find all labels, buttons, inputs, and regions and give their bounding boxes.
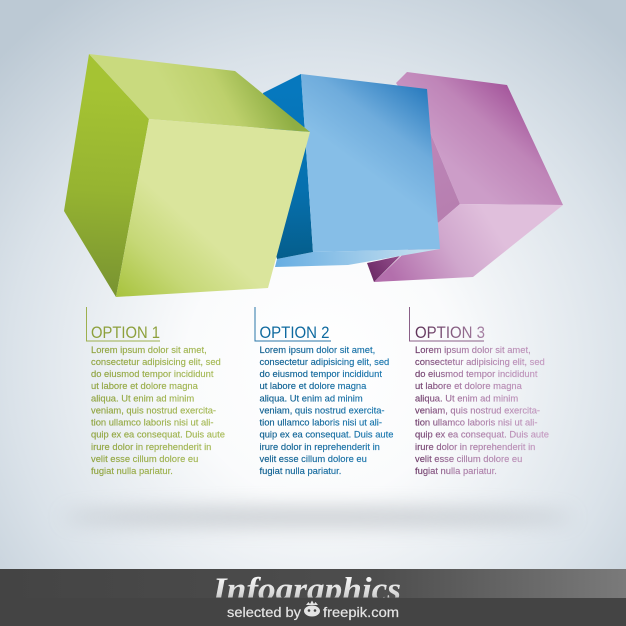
option 2 text: Lorem ipsum dolor sit amet, <box>260 344 375 355</box>
option 1 text <box>91 344 225 476</box>
icon: freepik logo <box>304 600 320 616</box>
option 2 text: veniam, quis nostrud exercita- <box>260 404 385 416</box>
infographics title: Infographics <box>212 572 401 608</box>
floor shadow <box>63 508 573 526</box>
option 1 heading: OPTION 1 <box>91 324 160 342</box>
green cube <box>64 54 310 297</box>
footer bar <box>0 569 626 626</box>
option 1 text: ut labore et dolore magna <box>91 380 199 391</box>
option 3 text: aliqua. Ut enim ad minim <box>415 392 518 404</box>
option 3 text: veniam, quis nostrud exercita- <box>415 404 540 416</box>
option 1 text: fugiat nulla pariatur. <box>91 465 173 476</box>
option 3 text: do eiusmod tempor incididunt <box>415 368 538 379</box>
freepik url: freepik.com <box>323 605 399 620</box>
option 1 column <box>86 307 225 476</box>
option 3 text: irure dolor in reprehenderit in <box>415 441 535 452</box>
option 1 text: veniam, quis nostrud exercita- <box>91 404 216 416</box>
option 3 text: quip ex ea consequat. Duis aute <box>415 428 549 440</box>
option 3 column <box>410 307 549 476</box>
option 2 heading: OPTION 2 <box>260 324 330 342</box>
option 2 text: fugiat nulla pariatur. <box>260 465 341 476</box>
option 1 text: tion ullamco laboris nisi ut ali- <box>91 416 213 428</box>
option 1 text: do eiusmod tempor incididunt <box>91 368 214 379</box>
purple cube <box>367 72 563 282</box>
option 2 text: velit esse cillum dolore eu <box>260 453 367 464</box>
option 1 text: quip ex ea consequat. Duis aute <box>91 428 225 440</box>
blue cube <box>263 74 440 267</box>
option 2 bracket <box>255 307 331 341</box>
option 3 text: velit esse cillum dolore eu <box>415 453 522 464</box>
option 2 text: aliqua. Ut enim ad minim <box>260 392 363 404</box>
option 2 text: quip ex ea consequat. Duis aute <box>260 428 393 440</box>
option 1 text: velit esse cillum dolore eu <box>91 453 198 464</box>
option 2 text: do eiusmod tempor incididunt <box>260 368 382 379</box>
option 3 text: Lorem ipsum dolor sit amet, <box>415 344 531 355</box>
option 2 text: consectetur adipisicing elit, sed <box>260 356 389 367</box>
option 3 bracket <box>410 307 484 341</box>
option 1 text: aliqua. Ut enim ad minim <box>91 392 194 404</box>
option 3 text: consectetur adipisicing elit, sed <box>415 356 545 367</box>
option 3 text: fugiat nulla pariatur. <box>415 465 497 476</box>
option 2 column <box>255 307 393 476</box>
option 1 text: consectetur adipisicing elit, sed <box>91 356 221 367</box>
selected by text: selected by <box>227 605 301 620</box>
option 2 text: tion ullamco laboris nisi ut ali- <box>260 416 382 428</box>
option 3 text: tion ullamco laboris nisi ut ali- <box>415 416 537 428</box>
option 2 text: irure dolor in reprehenderit in <box>260 441 380 452</box>
option 1 bracket <box>86 307 160 341</box>
option 2 text <box>260 344 393 476</box>
option 1 text: irure dolor in reprehenderit in <box>91 441 211 452</box>
option 2 text: ut labore et dolore magna <box>260 380 367 391</box>
option 3 heading: OPTION 3 <box>415 324 485 342</box>
option 3 text: ut labore et dolore magna <box>415 380 523 391</box>
option 1 text: Lorem ipsum dolor sit amet, <box>91 344 207 355</box>
option 3 text <box>415 344 549 476</box>
